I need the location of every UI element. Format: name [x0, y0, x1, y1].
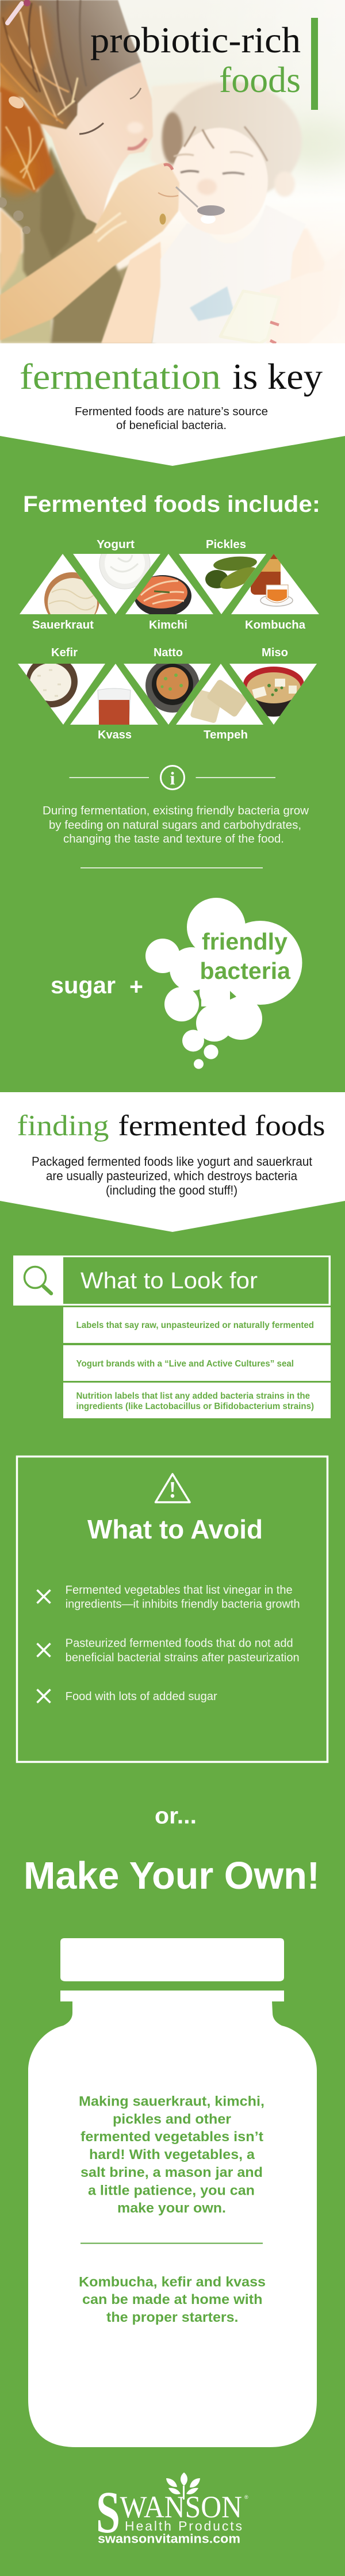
jar text: kombucha: Kombucha, kefir and kvass: [79, 2274, 266, 2290]
panel: what to look for / avoid / make your own green section: [0, 1201, 345, 2576]
jar text: making: [79, 2093, 264, 2216]
food labels: Kimchi: [149, 619, 187, 631]
hero title: [90, 20, 301, 100]
heading: fermentation is key: fermentation: [20, 356, 221, 397]
bacteria bubble cloud: bacteria: [200, 958, 291, 984]
logo: Swanson Health Products: Health Products: [125, 2518, 242, 2533]
triangle: sauerkraut: [20, 554, 108, 614]
fermentation explanation text: by feeding on natural sugars and carbohydrates,: [49, 819, 301, 832]
logo: Swanson Health Products: WANSON: [120, 2490, 242, 2524]
intro text: [75, 405, 268, 432]
icon: x marks: [37, 1590, 51, 1702]
fermentation explanation text: During fermentation, existing friendly bacteria grow: [43, 805, 309, 817]
food labels: Tempeh: [204, 729, 248, 741]
logo: Swanson Health Products: ®: [244, 2494, 248, 2500]
heading: fermentation is key: is key: [232, 356, 323, 397]
heading: finding fermented foods: fermented foods: [118, 1110, 325, 1142]
icon: leaves: [166, 2472, 200, 2500]
intro text: of beneficial bacteria.: [116, 419, 227, 432]
triangle: kimchi: [125, 554, 213, 617]
jar illustration: [28, 1938, 317, 2447]
list: avoid items: Food with lots of added sugar: [66, 1690, 217, 1703]
list: what to look for items: ingredients (like Lactobacillus or Bifidobacterium strains): [76, 1402, 314, 1411]
sugar plus label: sugar: [51, 972, 116, 998]
food labels: Pickles: [206, 538, 246, 551]
heading: finding fermented foods: [17, 1110, 325, 1142]
finding text: are usually pasteurized, which destroys bacteria: [46, 1169, 298, 1183]
jar text: making: Making sauerkraut, kimchi,: [79, 2093, 264, 2110]
hero photo: mother feeding child: [0, 0, 345, 343]
icon: info divider: [69, 766, 275, 789]
jar text: making: hard! With vegetables, a: [89, 2147, 255, 2162]
search bar: what to look for: What to Look for: [80, 1268, 258, 1293]
jar text: making: salt brine, a mason jar and: [80, 2165, 263, 2180]
icon: info divider: i: [170, 768, 175, 789]
triangle: natto: [124, 659, 211, 725]
panel: what to avoid: [17, 1456, 328, 1762]
list: avoid items: Fermented vegetables that list vinegar in the: [66, 1584, 293, 1597]
title accent bar: [311, 18, 318, 110]
heading: finding fermented foods: finding: [17, 1110, 109, 1142]
list: what to look for items: [63, 1307, 331, 1418]
or text: or...: [155, 1804, 197, 1829]
jar lid: [60, 1938, 284, 1981]
jar text: making: pickles and other: [113, 2112, 231, 2127]
triangle: kefir: [18, 664, 105, 725]
food labels: Kefir: [51, 646, 78, 659]
finding text: [32, 1154, 312, 1197]
food labels: Kvass: [98, 729, 132, 741]
finding text: Packaged fermented foods like yogurt and sauerkraut: [32, 1154, 312, 1169]
heading: fermentation is key: [20, 356, 323, 397]
panel: what to avoid: What to Avoid: [87, 1514, 263, 1544]
fermentation explanation text: changing the taste and texture of the food.: [63, 833, 284, 845]
panel: fermented foods green section: [0, 436, 345, 1092]
hero title: probiotic-rich: [90, 20, 301, 60]
list: avoid items: Pasteurized fermented foods that do not add: [66, 1637, 293, 1649]
triangle: kvass: [70, 664, 158, 725]
food labels: Miso: [262, 646, 288, 659]
food labels: Natto: [154, 646, 183, 659]
logo: Swanson Health Products: [96, 2472, 248, 2546]
heading: make your own: Make Your Own!: [24, 1854, 320, 1897]
list: avoid items: beneficial bacterial strains after pasteurization: [66, 1652, 300, 1664]
triangle: pickles: [179, 554, 266, 614]
logo: Swanson Health Products: swansonvitamins.com: [98, 2532, 240, 2546]
food labels: Kombucha: [245, 619, 306, 631]
fermentation explanation text: [43, 805, 309, 845]
intro text: Fermented foods are nature’s source: [75, 405, 268, 418]
logo: Swanson Health Products: S: [96, 2479, 120, 2546]
triangle: miso: [229, 664, 317, 725]
triangle: kombucha: [231, 554, 319, 614]
list: what to look for items: Labels that say raw, unpasteurized or naturally fermented: [76, 1320, 314, 1330]
search bar: what to look for: [13, 1256, 331, 1306]
hero title: foods: [219, 59, 301, 100]
icon: magnifying glass: [24, 1266, 51, 1293]
finding text: (including the good stuff!): [106, 1183, 237, 1197]
bacteria bubble cloud: friendly: [202, 928, 288, 955]
jar body: [28, 1991, 317, 2447]
food labels: [32, 538, 306, 741]
sugar plus label: +: [129, 973, 143, 1000]
jar text: making: a little patience, you can: [88, 2183, 255, 2198]
jar text: making: fermented vegetables isn’t: [80, 2129, 263, 2145]
sugar plus label: [51, 972, 143, 1000]
jar text: kombucha: can be made at home with: [82, 2292, 262, 2307]
food labels: Yogurt: [97, 538, 135, 551]
list: avoid items: ingredients—it inhibits friendly bacteria growth: [66, 1598, 300, 1610]
list: what to look for items: Nutrition labels that list any added bacteria strains in the: [76, 1391, 310, 1401]
triangle: tempeh: [176, 664, 263, 725]
heading: fermented foods include: Fermented foods include:: [23, 492, 320, 517]
list: what to look for items: Yogurt brands with a “Live and Active Cultures” seal: [76, 1359, 294, 1369]
food labels: Sauerkraut: [32, 619, 94, 631]
bacteria bubble cloud: [145, 898, 302, 1069]
triangle: yogurt: [73, 554, 160, 614]
jar text: kombucha: [79, 2274, 266, 2325]
list: avoid items: [66, 1584, 300, 1703]
jar text: kombucha: the proper starters.: [106, 2310, 238, 2325]
icon: warning triangle: [155, 1474, 190, 1502]
jar text: making: make your own.: [117, 2200, 226, 2216]
